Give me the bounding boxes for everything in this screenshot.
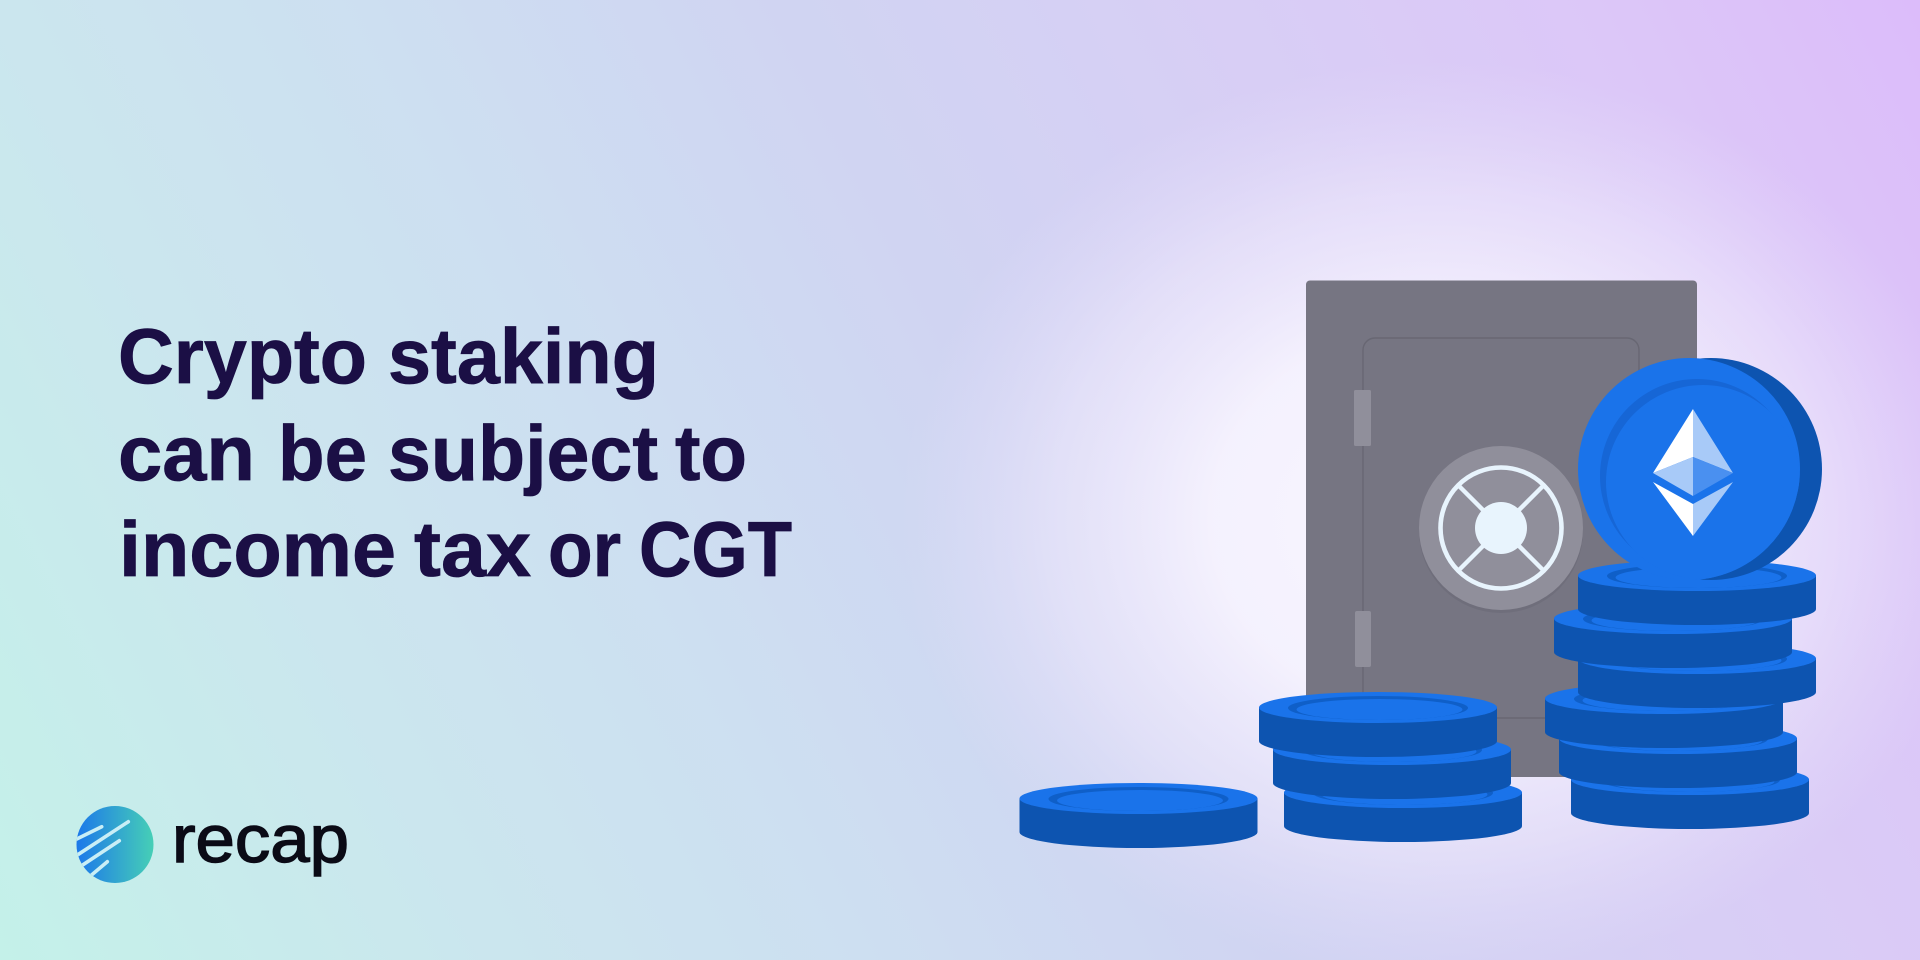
title: tax <box>414 505 531 593</box>
upright ethereum coin <box>1578 358 1822 580</box>
title: Crypto <box>118 312 367 400</box>
logo wordmark: recap <box>172 802 349 877</box>
upper hinge <box>1354 390 1371 446</box>
safe body <box>1306 280 1697 777</box>
icon: logo disc with stripes <box>72 806 154 883</box>
coin face <box>1578 358 1800 580</box>
title: subject <box>388 409 658 497</box>
title: to <box>675 409 747 497</box>
icon: ethereum diamond <box>1653 409 1733 536</box>
safe dial <box>1419 446 1583 613</box>
coin back edge <box>1600 358 1822 580</box>
coin inner recess <box>1600 379 1800 579</box>
title: income <box>119 505 396 593</box>
title: or <box>548 505 621 593</box>
safe door outline <box>1363 338 1639 718</box>
coin: single flat coin <box>1020 783 1258 848</box>
logo: recap <box>72 802 349 883</box>
title <box>118 312 792 593</box>
title: staking <box>388 312 659 400</box>
title: be <box>278 409 367 497</box>
coin stack: middle <box>1259 692 1522 842</box>
coin stack: right <box>1545 560 1816 829</box>
title: CGT <box>639 505 792 593</box>
lower hinge <box>1355 611 1371 667</box>
title: can <box>118 409 255 497</box>
illustration: safe <box>1306 280 1697 777</box>
